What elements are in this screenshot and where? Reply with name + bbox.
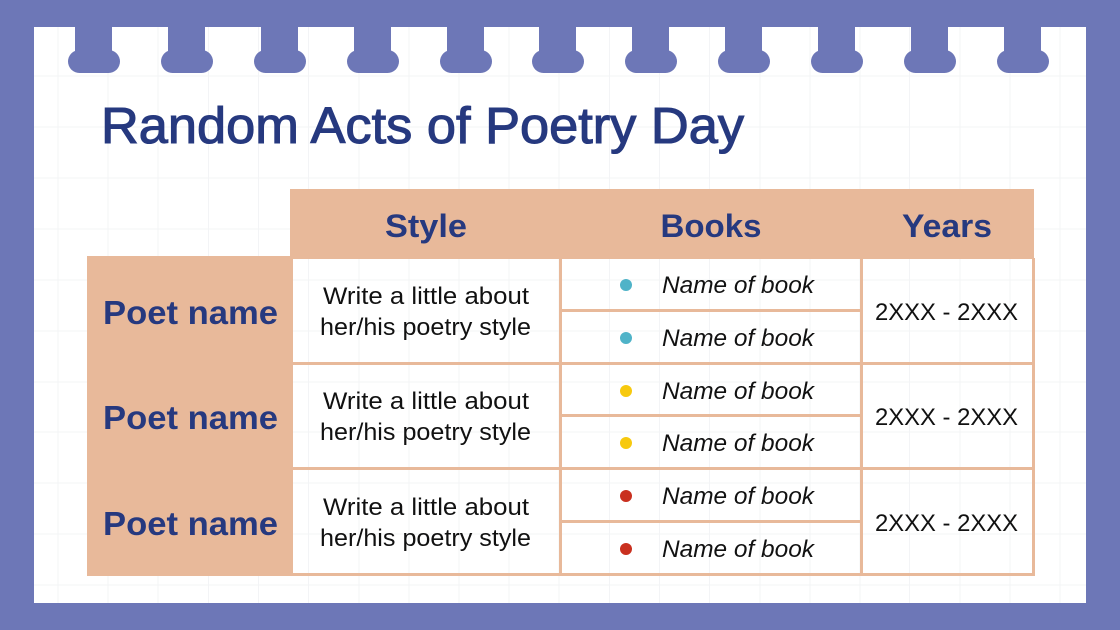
poet name column: Poet name xyxy=(103,399,278,436)
row 1 xyxy=(320,272,1018,352)
row 2: Write a little about xyxy=(323,388,529,415)
table grid xyxy=(290,258,1035,576)
header row: Years xyxy=(902,208,992,244)
title: Random Acts of Poetry Day xyxy=(101,97,745,154)
header row: Books xyxy=(660,208,762,244)
row 2: Name of book xyxy=(662,430,816,457)
header row xyxy=(290,189,1034,259)
row 3: 2XXX - 2XXX xyxy=(875,510,1018,537)
poet name column: Poet name xyxy=(103,294,278,331)
row 3: Name of book xyxy=(662,536,816,563)
row 2: her/his poetry style xyxy=(320,419,531,446)
row 3: Write a little about xyxy=(323,494,529,521)
notebook binding tabs xyxy=(68,20,1049,73)
row 1: Name of book xyxy=(662,272,816,299)
poet name column xyxy=(87,256,293,576)
row 1: her/his poetry style xyxy=(320,314,531,341)
row 2 xyxy=(320,378,1018,457)
row 1: Write a little about xyxy=(323,283,529,310)
row 3: Name of book xyxy=(662,483,816,510)
header row: Style xyxy=(385,208,467,244)
poet name column: Poet name xyxy=(103,505,278,542)
row 1: Name of book xyxy=(662,325,816,352)
row 2: 2XXX - 2XXX xyxy=(875,404,1018,431)
row 1: 2XXX - 2XXX xyxy=(875,299,1018,326)
row 2: Name of book xyxy=(662,378,816,405)
row 3 xyxy=(320,483,1018,563)
table xyxy=(87,189,1035,576)
row 3: her/his poetry style xyxy=(320,525,531,552)
